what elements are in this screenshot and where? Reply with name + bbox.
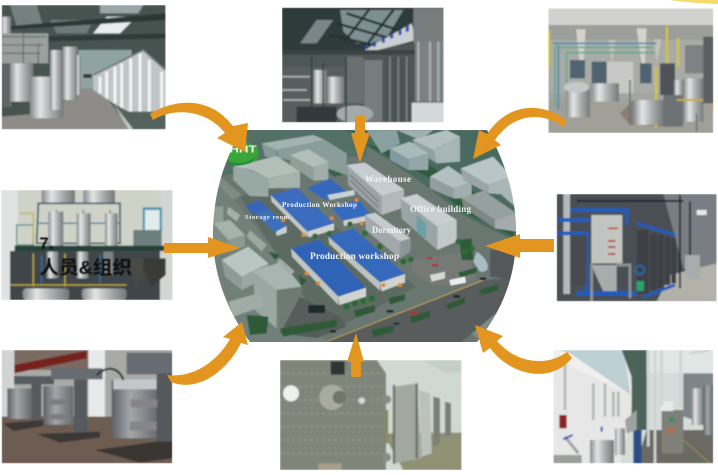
the far workshop [271,188,334,232]
arrow: bottom-centre photo to centre [347,333,364,377]
label: upper Production Workshop: Production Workshop [282,201,357,209]
logo: green oval badge: HHT [229,145,257,156]
road and plaza [327,278,510,342]
the small storage roofs [245,200,268,215]
photo: reactor room with coloured pipes [548,8,713,133]
label: Office building: Office building [410,204,472,214]
arrow: top-left photo to centre [150,103,248,152]
hedges [247,238,498,337]
photo: tank hall with skylight [2,5,166,129]
label: lower Production workshop: Production workshop [310,252,399,262]
the near workshops [291,239,366,297]
cars and landscape dots [410,257,438,314]
arrow: bottom-right photo to centre [475,325,572,374]
arrow: bottom-left photo to centre [167,322,248,385]
arrow: middle-left photo to centre [164,237,240,258]
arrow: top-right photo to centre [473,108,567,159]
arrow: middle-right photo to centre [485,234,554,258]
photo: grey centrifuges [2,350,172,463]
photo: white-walled pump corridor [553,350,713,463]
logo: green oval badge [224,142,259,165]
photo: blue membrane filtration unit [557,194,717,301]
overlay caption text: 人员&组织 [39,257,132,278]
photo: evaporator platform with overlay text [1,190,173,300]
label: Dormitory: Dormitory [372,225,411,235]
photo: stainless vacuum dryers [280,360,462,470]
label: Warehouse: Warehouse [365,174,411,184]
dormitory block [365,213,411,242]
warehouse block [347,163,404,196]
yellow corner accent [670,0,718,4]
photo: workshop with blue signage [282,8,444,123]
arrow: top-centre photo to centre [351,116,370,163]
office block [401,194,457,227]
label: Storage room: Storage room [245,214,290,221]
overlay caption number: 7. [39,234,53,253]
panel: central factory park aerial view [210,128,520,343]
the background block buildings [213,130,517,343]
